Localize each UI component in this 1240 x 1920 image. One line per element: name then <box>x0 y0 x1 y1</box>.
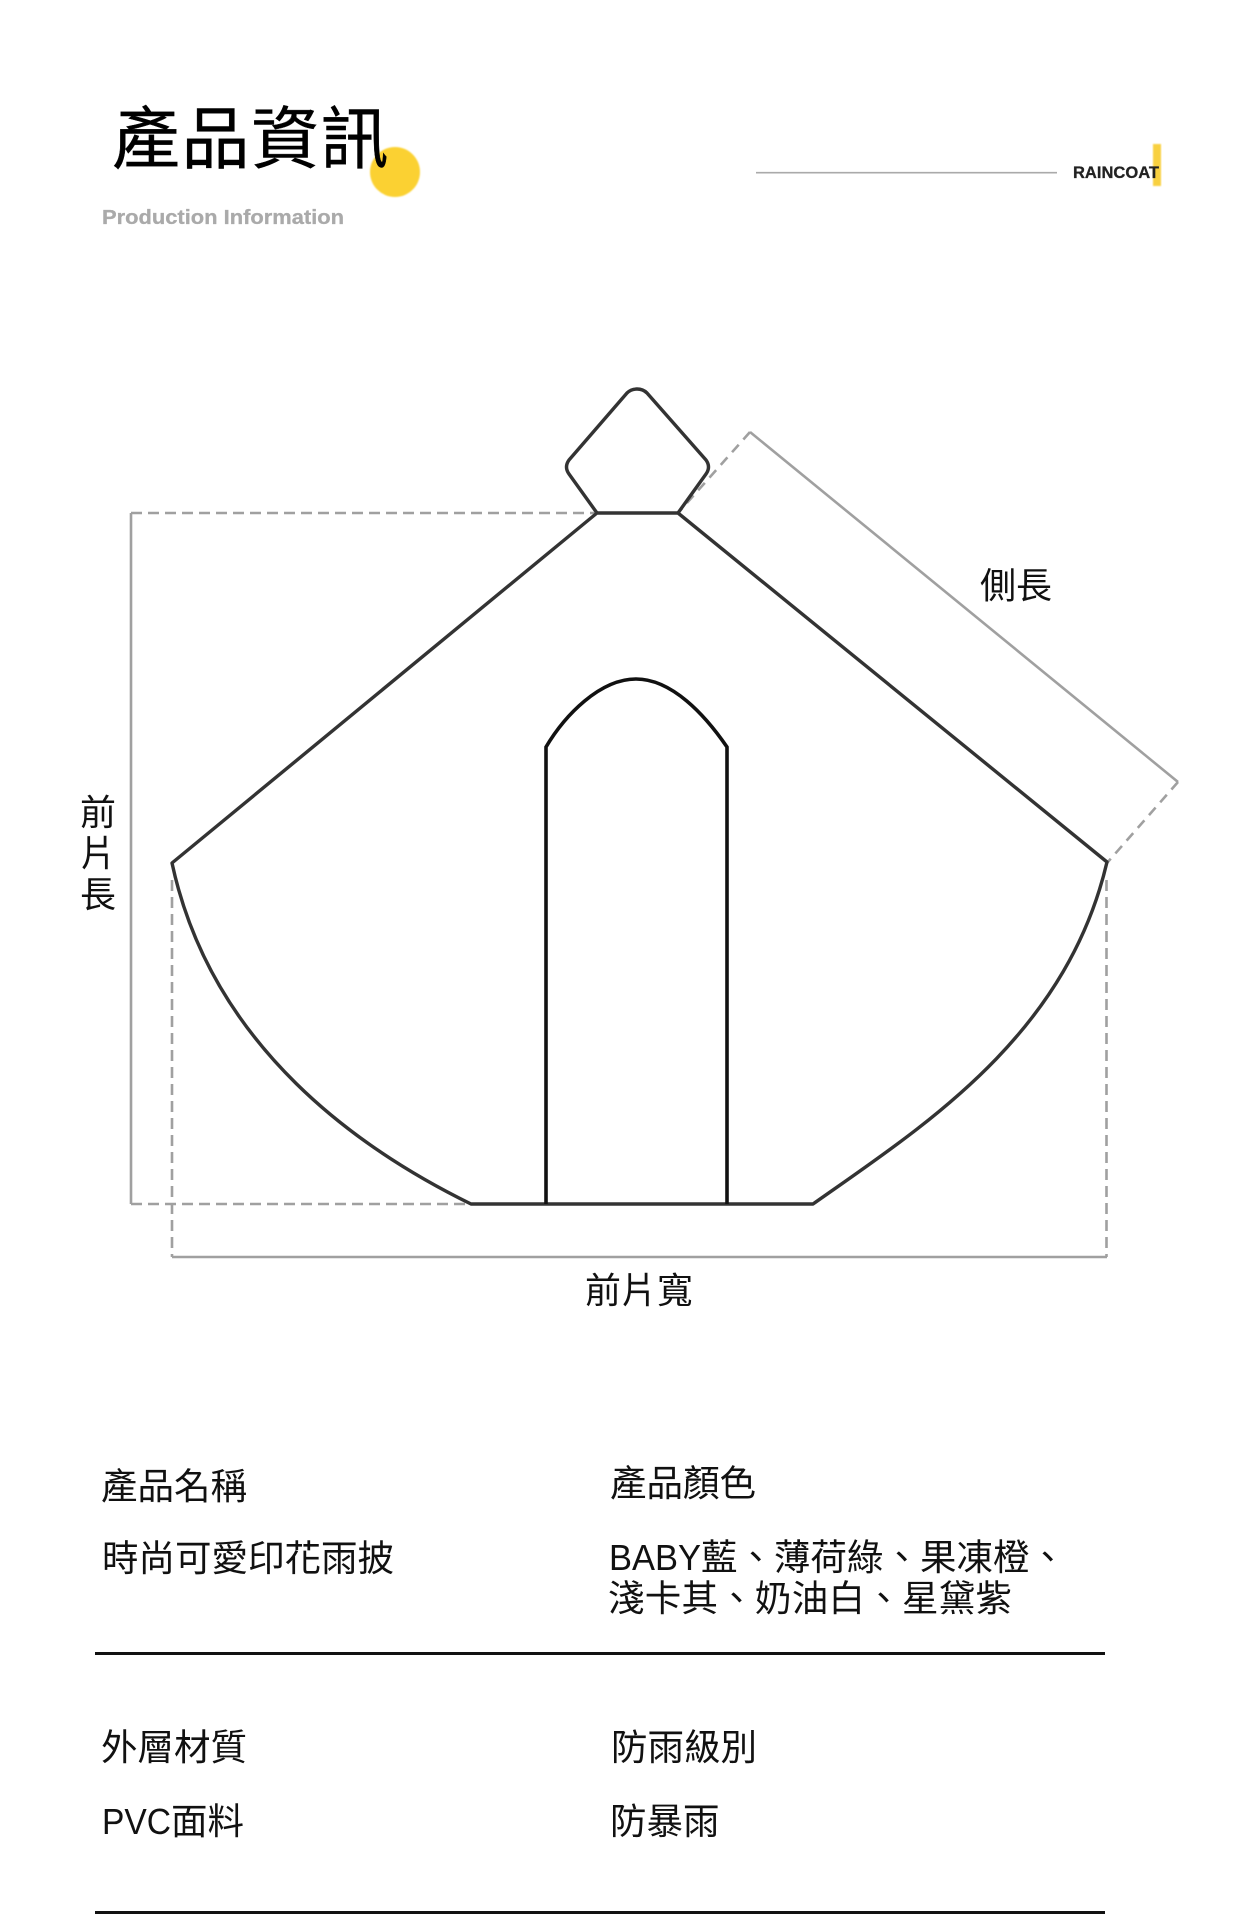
front opening <box>546 679 727 1204</box>
spec: outer material: PVC <box>102 1801 171 1842</box>
divider <box>95 1652 1105 1655</box>
subtitle: Production Information <box>102 207 344 229</box>
poncho outline <box>172 513 1107 1204</box>
spec: product colors: 淺卡其、奶油白、星黛紫 <box>608 1578 1012 1619</box>
label: front length <box>80 792 116 915</box>
yellow bar <box>1153 144 1161 186</box>
spec: outer material <box>101 1727 247 1842</box>
spec: product colors: 產品顏色 <box>610 1463 756 1504</box>
label: front width: 前片寬 <box>585 1270 693 1311</box>
spec: product name: 產品名稱 <box>101 1466 247 1507</box>
title: 產品資訊 <box>112 102 390 178</box>
tag label: RAINCOAT <box>1073 164 1159 182</box>
icon: yellow circle <box>370 147 420 197</box>
spec: product colors <box>608 1463 1066 1619</box>
dimension: side length <box>678 432 1178 863</box>
hood <box>566 389 708 513</box>
spec row 1 <box>101 1463 1066 1619</box>
label: front length: 長 <box>80 874 116 915</box>
header: title block <box>102 102 420 229</box>
dimension: front length <box>131 513 597 1204</box>
header: raincoat tag <box>756 144 1161 186</box>
divider <box>95 1911 1105 1914</box>
spec: product colors: 藍、薄荷綠、果凍橙、 <box>701 1537 1066 1578</box>
spec: outer material: 外層材質 <box>101 1727 247 1768</box>
diagram: poncho with dimensions <box>80 389 1178 1311</box>
label: front length: 前 <box>80 792 116 833</box>
spec row 2 <box>101 1727 757 1842</box>
label: side length: 側長 <box>980 565 1052 606</box>
spec: rain level: 防雨級別 <box>611 1727 757 1768</box>
spec: product name: 時尚可愛印花雨披 <box>102 1538 394 1579</box>
dimension: front width <box>172 880 1107 1257</box>
spec: rain level <box>610 1727 757 1842</box>
label: front length: 片 <box>80 833 116 874</box>
spec: rain level: 防暴雨 <box>610 1801 720 1842</box>
spec: product name <box>101 1466 394 1579</box>
spec: product colors: BABY <box>609 1537 701 1578</box>
spec: outer material: 面料 <box>171 1801 244 1842</box>
